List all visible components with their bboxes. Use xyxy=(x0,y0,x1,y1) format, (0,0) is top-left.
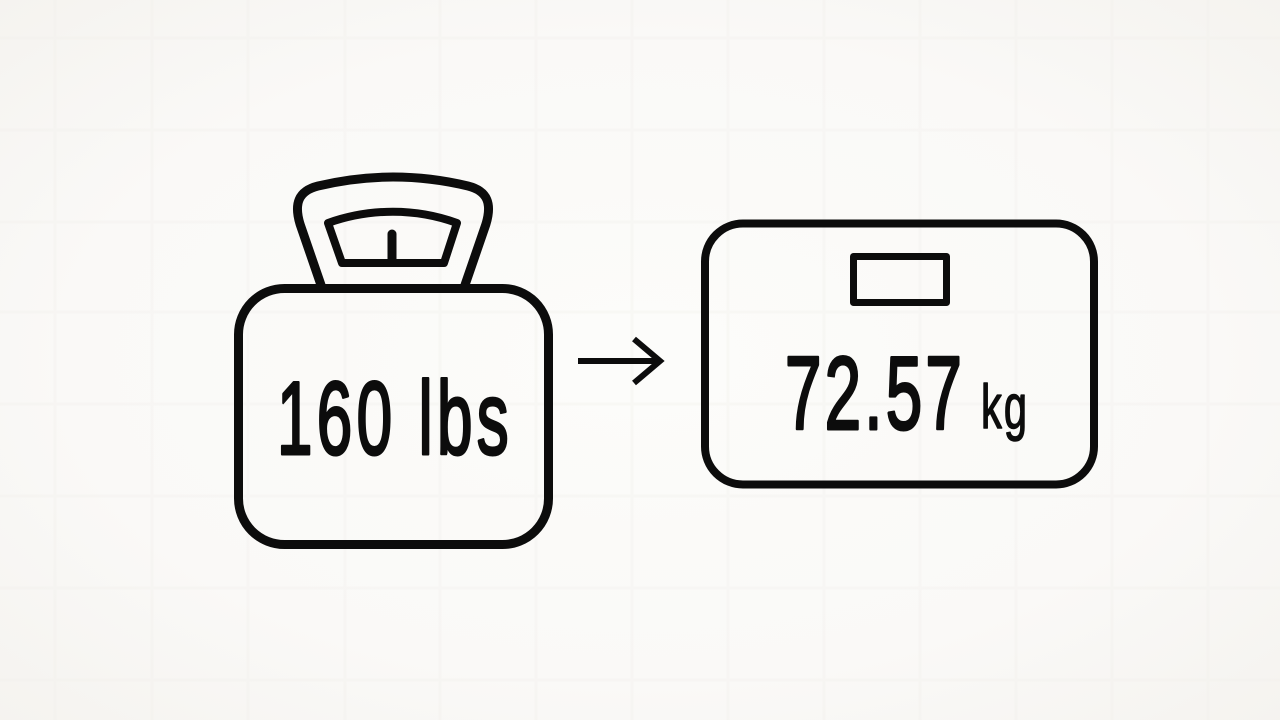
value: 72.57: 72.57 xyxy=(785,336,965,452)
value: 160 lbs: 160 lbs xyxy=(277,361,513,477)
scale body xyxy=(238,288,548,544)
scale dial window xyxy=(328,212,457,263)
digital scale body xyxy=(705,224,1094,484)
icon: mechanical scale with 160 lbs xyxy=(238,177,548,544)
arrow xyxy=(578,339,660,383)
digital display xyxy=(854,256,946,302)
scale dial housing xyxy=(297,177,489,285)
icon: digital scale with 72.57 kg xyxy=(705,224,1094,484)
unit: kg: kg xyxy=(981,373,1029,442)
scale needle xyxy=(388,234,396,262)
